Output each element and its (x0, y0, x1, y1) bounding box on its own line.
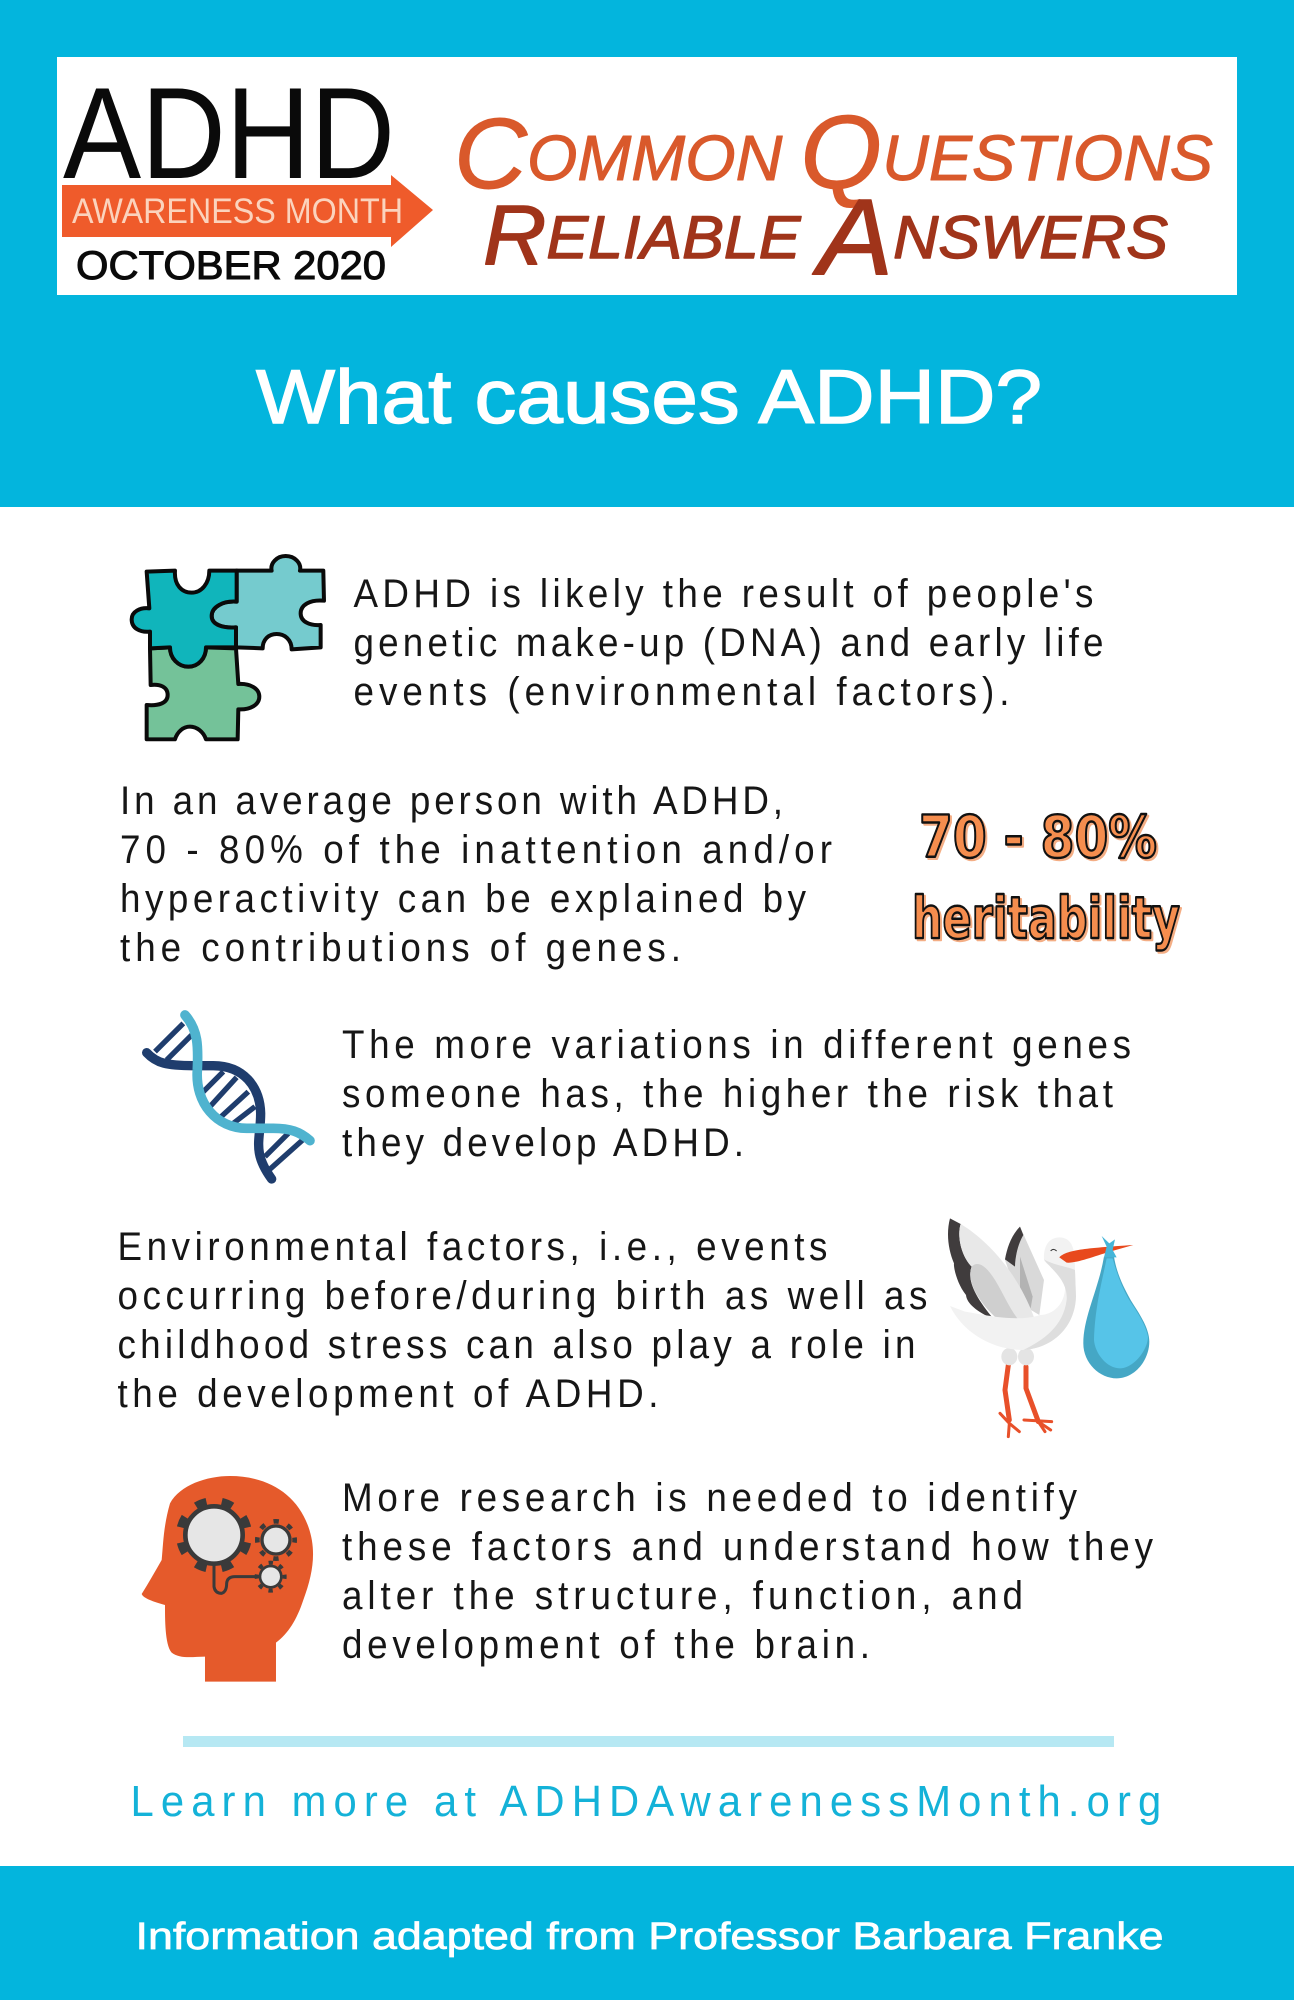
section: gene variations (147, 1015, 1131, 1179)
icon: stork carrying bundle (948, 1218, 1149, 1437)
text: likely result (354, 572, 1103, 714)
icon: DNA helix (147, 1015, 310, 1179)
handwritten heading line 2: R (483, 188, 546, 282)
logo wordmark ADHD: ADHD (63, 60, 395, 206)
text: contributions of genes: In an average person with ADHD, (120, 779, 783, 823)
title: What causes ADHD? (256, 355, 1042, 440)
handwritten heading line 1: UESTIONS (882, 122, 1213, 194)
text: likely result: ADHD is likely the result of people's (354, 572, 1093, 616)
text: more research needed: these factors and understand how they (342, 1525, 1154, 1569)
callout: 70 - 80% heritability (912, 803, 1180, 952)
footer band (0, 1866, 1294, 2000)
text: environmental factors: occurring before/during birth as well as (118, 1274, 927, 1318)
handwritten heading line 2: NSWERS (893, 204, 1168, 271)
footer credit: Information adapted from Professor Barbara Franke (136, 1916, 1164, 1958)
date label: OCTOBER 2020 (76, 244, 386, 288)
text: more research needed (342, 1476, 1154, 1667)
text: likely result: events (environmental factors). (354, 670, 1009, 714)
text: contributions of genes: 70 - 80% of the inattention and/or (120, 828, 832, 872)
handwritten heading line 2: A (812, 176, 893, 297)
text: environmental factors: Environmental factors, i.e., events (118, 1225, 827, 1269)
text: more research needed: alter the structure, function, and (342, 1574, 1023, 1618)
banner: ADHD Awareness Month (57, 57, 1237, 297)
section: environmental factors (118, 1218, 1149, 1437)
text: environmental factors (118, 1225, 927, 1416)
text: variations in genes: someone has, the higher the risk that (342, 1072, 1113, 1116)
icon: orange arrow (62, 175, 433, 247)
text: contributions of genes: hyperactivity can be explained by (120, 877, 807, 921)
icon: head with gears (142, 1476, 313, 1682)
text: more research needed: development of the brain. (342, 1623, 870, 1667)
awareness month label: AWARENESS MONTH (72, 192, 403, 231)
text: likely result: genetic make-up (DNA) and early life (354, 621, 1103, 665)
link: learn more: Learn more at ADHDAwarenessMonth.org (130, 1777, 1161, 1826)
handwritten heading line 2: ELIABLE (546, 204, 818, 271)
section: heritability (120, 779, 1180, 970)
icon: puzzle pieces (132, 556, 324, 739)
section: more research (142, 1476, 1154, 1682)
callout: 70 - 80% heritability: heritability (912, 884, 1180, 952)
text: environmental factors: childhood stress can also play a role in (118, 1323, 916, 1367)
text: variations in genes (342, 1023, 1131, 1165)
text: environmental factors: the development of ADHD. (118, 1372, 658, 1416)
handwritten heading line 1: OMMON (527, 122, 800, 194)
callout: 70 - 80% heritability: 70 - 80% (919, 803, 1157, 871)
text: more research needed: More research is needed to identify (342, 1476, 1078, 1520)
text: contributions of genes: the contributions of genes. (120, 926, 681, 970)
handwritten heading line 1: C (454, 98, 528, 210)
text: variations in genes: they develop ADHD. (342, 1121, 744, 1165)
text: contributions of genes (120, 779, 832, 970)
text: variations in genes: The more variations in different genes (342, 1023, 1131, 1067)
handwritten heading line 1: Q (800, 95, 882, 211)
section: genes and environment (132, 556, 1103, 739)
header band (0, 0, 1294, 507)
